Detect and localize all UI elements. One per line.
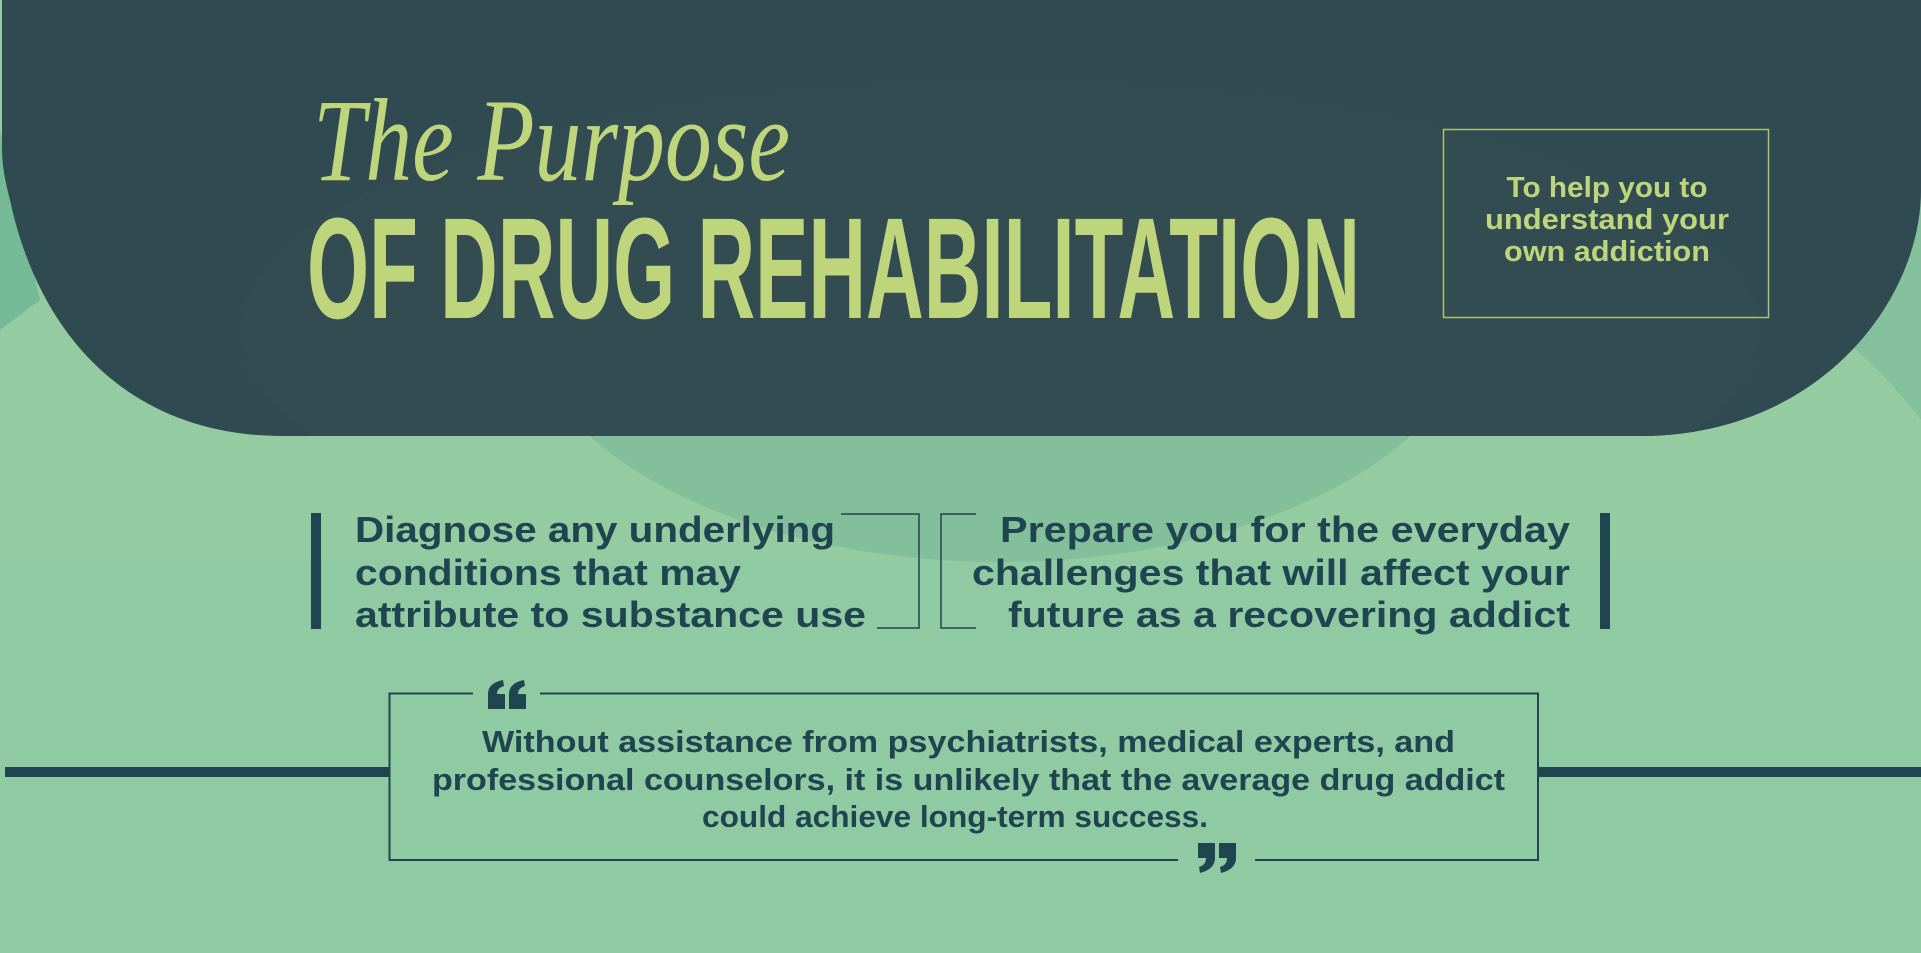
horizontal rule through quote <box>5 767 1921 777</box>
quote box: Without assistance from psychiatrists, medical experts, and <box>482 724 1455 759</box>
panel: prepare: future as a recovering addict <box>1008 594 1570 635</box>
panel: diagnose: Diagnose any underlying <box>355 509 835 550</box>
panel: diagnose: attribute to substance use <box>355 594 866 635</box>
quote box <box>390 680 1538 873</box>
callout box: understand addiction: understand your <box>1485 204 1729 236</box>
panel: prepare: challenges that will affect your <box>972 552 1570 593</box>
icon: close quote <box>1198 843 1236 873</box>
quote box: could achieve long-term success. <box>702 799 1208 834</box>
quote box: professional counselors, it is unlikely that the average drug addict <box>432 762 1505 797</box>
panel: diagnose <box>311 509 919 635</box>
callout box: understand addiction <box>1444 130 1768 318</box>
icon: open quote <box>488 680 526 709</box>
panel: prepare <box>941 509 1610 635</box>
callout box: understand addiction: To help you to <box>1506 172 1708 204</box>
header dark panel <box>2 0 1921 436</box>
title script: The Purpose: The Purpose <box>313 75 790 206</box>
panel: diagnose: conditions that may <box>355 552 741 593</box>
callout box: understand addiction: own addiction <box>1504 236 1710 268</box>
panel: prepare: Prepare you for the everyday <box>1000 509 1570 550</box>
